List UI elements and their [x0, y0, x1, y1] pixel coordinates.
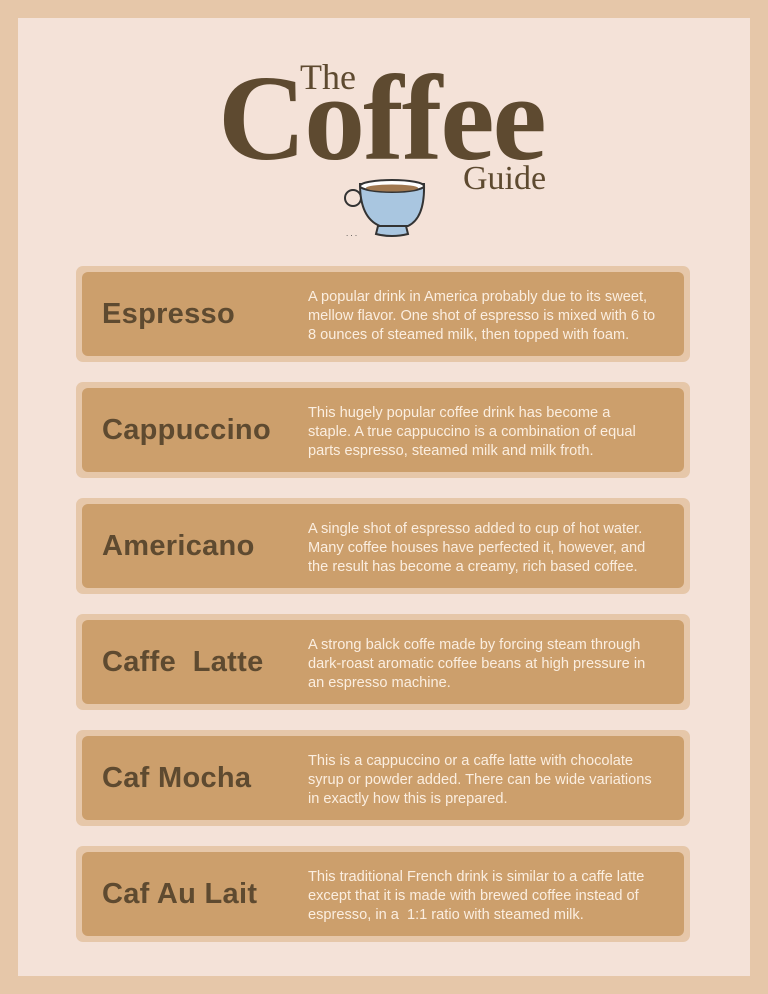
card: Espresso: mellow flavor. One shot of espresso is mixed with 6 to: [308, 308, 655, 324]
card: Cappuccino: Cappuccino: [102, 414, 271, 446]
card: Caf Au Lait: except that it is made with brewed coffee instead of: [308, 888, 639, 904]
card: Caffe Latte: an espresso machine.: [308, 675, 451, 691]
title: The: The: [300, 57, 356, 97]
card: Caffe Latte: A strong balck coffe made by forcing steam through: [308, 637, 640, 653]
card: Cappuccino: This hugely popular coffee drink has become a: [308, 405, 610, 421]
card: Cappuccino: [76, 382, 690, 478]
card: Cappuccino: parts espresso, steamed milk and milk froth.: [308, 443, 594, 459]
card: Caffe Latte: [76, 614, 690, 710]
card: Caf Mocha: syrup or powder added. There can be wide variations: [308, 772, 652, 788]
card: Caffe Latte: Caffe Latte: [102, 646, 264, 678]
card: Americano: Many coffee houses have perfected it, however, and: [308, 540, 645, 556]
card: Espresso: 8 ounces of steamed milk, then topped with foam.: [308, 327, 629, 343]
card: Caf Mocha: in exactly how this is prepared.: [308, 791, 508, 807]
card: Espresso: Espresso: [102, 298, 235, 330]
title: Coffee: Coffee: [218, 51, 545, 186]
card: Americano: Americano: [102, 530, 255, 562]
title: [218, 51, 546, 197]
icon: coffee cup: . . .: [346, 229, 357, 238]
icon: coffee cup: [344, 179, 426, 238]
card: Espresso: A popular drink in America probably due to its sweet,: [308, 289, 647, 305]
card: Caf Mocha: [76, 730, 690, 826]
card: Caf Au Lait: Caf Au Lait: [102, 878, 257, 910]
card: Cappuccino: staple. A true cappuccino is a combination of equal: [308, 424, 636, 440]
card: Caf Au Lait: espresso, in a 1:1 ratio with steamed milk.: [308, 907, 584, 923]
card: Caf Au Lait: [76, 846, 690, 942]
card: Espresso: [76, 266, 690, 362]
card: Caf Mocha: Caf Mocha: [102, 762, 251, 794]
card: Americano: the result has become a creamy, rich based coffee.: [308, 559, 638, 575]
title: Guide: Guide: [463, 160, 546, 197]
card: Caf Au Lait: This traditional French drink is similar to a caffe latte: [308, 869, 644, 885]
card: Caffe Latte: dark-roast aromatic coffee beans at high pressure in: [308, 656, 645, 672]
card: Caf Mocha: This is a cappuccino or a caffe latte with chocolate: [308, 753, 633, 769]
card: Americano: A single shot of espresso added to cup of hot water.: [308, 521, 642, 537]
card: Americano: [76, 498, 690, 594]
